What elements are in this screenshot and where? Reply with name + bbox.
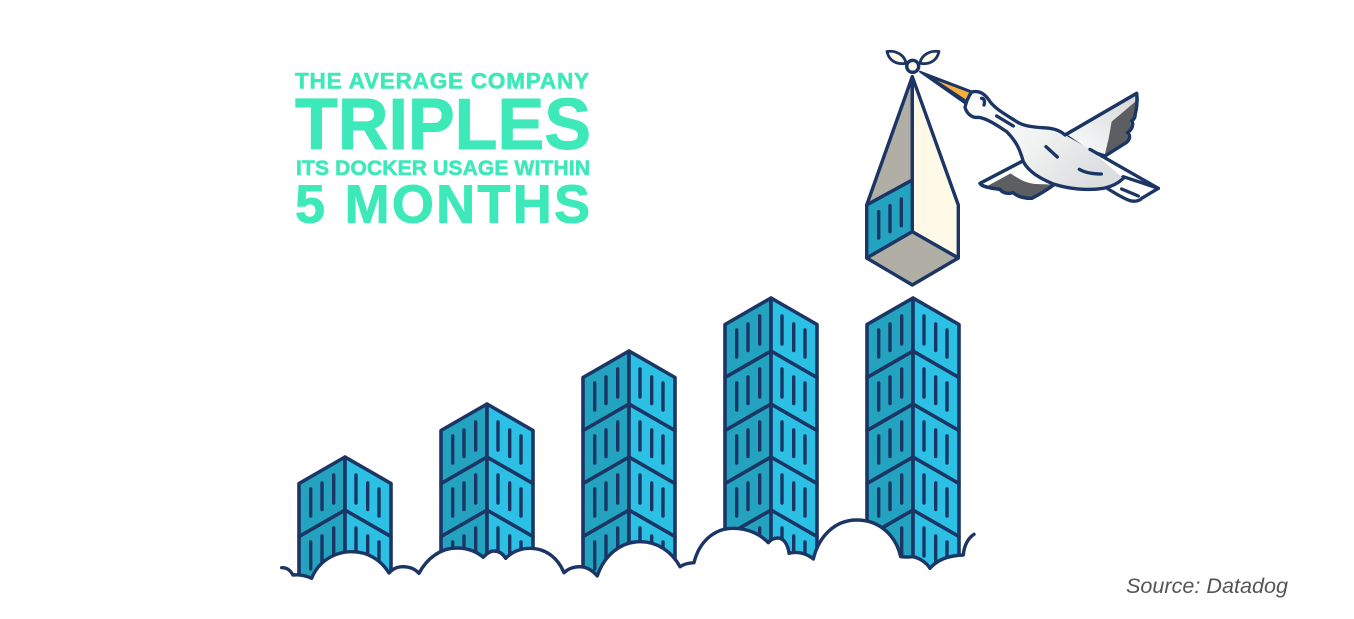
package bottom grey face (867, 232, 958, 285)
title line 4: 5 MONTHS (295, 174, 590, 234)
right knot leaf (920, 51, 939, 64)
title: the average company triples its Docker usage within 5 months (295, 68, 591, 234)
tower 3: four containers (583, 351, 675, 590)
body and neck fill (965, 92, 1123, 189)
neck, body and wing details (982, 98, 1138, 196)
package left grey face (867, 77, 912, 205)
source note: Source: Datadog (1126, 575, 1288, 598)
title line 2: TRIPLES (295, 85, 591, 165)
tower 2: three containers (441, 404, 533, 590)
package blue container face (867, 180, 912, 258)
clouds covering the tower bases (282, 520, 974, 619)
body and neck outline (965, 92, 1123, 189)
title line 3: ITS DOCKER USAGE WITHIN (296, 157, 590, 180)
beak (920, 72, 972, 104)
tower 4: five containers (725, 298, 817, 590)
tower 5: five containers (867, 298, 959, 590)
lower wing (980, 161, 1054, 198)
tail top edge (1090, 149, 1158, 188)
tower 1: two containers (299, 457, 391, 590)
tail feathers (1107, 177, 1158, 201)
upper wing (1065, 93, 1137, 156)
icon: container package hanging from the stork's beak (867, 51, 958, 285)
knot ring (907, 60, 919, 72)
icon: stork carrying the package (920, 72, 1158, 201)
package container ribs (879, 199, 901, 238)
title line 1: THE AVERAGE COMPANY (295, 68, 589, 94)
left knot leaf (887, 51, 906, 64)
package right cream face (912, 77, 958, 258)
